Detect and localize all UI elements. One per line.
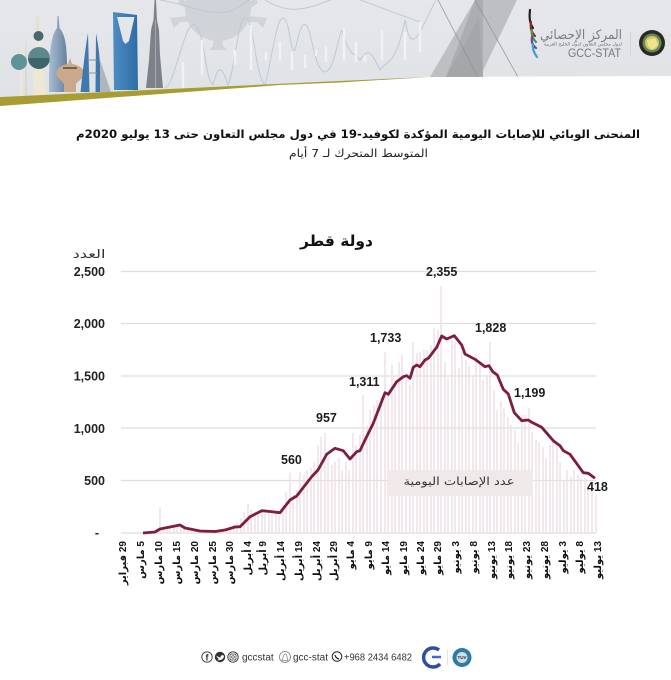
organisation name Arabic: المركز الإحصائي — [540, 28, 622, 43]
x axis date labels: 18 يونيو — [504, 541, 515, 580]
skyline: blue tower — [49, 16, 68, 92]
y axis labels: 1,500 — [74, 370, 105, 384]
skyline: Bahrain world trade center — [80, 33, 111, 92]
logo: round seal — [452, 648, 472, 667]
skyline: Burj Khalifa — [146, 0, 163, 88]
x axis date labels: 24 أبريل — [310, 541, 323, 581]
data labels: 560 — [281, 453, 302, 467]
x axis date labels: 24 مايو — [416, 541, 427, 576]
y axis labels: 1,000 — [74, 422, 105, 436]
x axis date labels: 10 مارس — [154, 541, 165, 584]
data labels: 1,828 — [475, 321, 506, 335]
data labels: 1,199 — [514, 386, 545, 400]
x axis date labels: 8 يوليو — [575, 541, 586, 574]
x axis date labels: 19 مايو — [399, 541, 410, 576]
grey diagonal shapes — [430, 0, 518, 77]
icon: snapchat — [280, 652, 290, 662]
icon: facebook: f — [206, 652, 210, 662]
olive band — [0, 77, 430, 106]
x axis date labels: 13 يونيو — [487, 541, 498, 580]
x axis date labels: 4 مايو — [346, 541, 357, 570]
x axis date labels: 25 مارس — [208, 541, 219, 584]
seven day moving average line — [143, 336, 595, 533]
x axis date labels: 19 أبريل — [292, 541, 305, 581]
data labels: 1,733 — [370, 331, 401, 345]
x axis date labels: 5 مارس — [136, 541, 147, 579]
x axis date labels: 29 فبراير — [118, 541, 129, 586]
x axis date labels: 23 يونيو — [522, 541, 533, 580]
x axis date labels: 20 مارس — [190, 541, 201, 584]
icon: instagram — [228, 652, 238, 662]
organisation subtitle Arabic: لدول مجلس التعاون لدول الخليج العربية — [544, 42, 622, 48]
x axis date labels: 3 يوليو — [558, 541, 569, 574]
y axis labels: 2,000 — [74, 317, 105, 331]
y axis labels — [74, 265, 105, 540]
x axis date labels: 4 أبريل — [241, 541, 254, 575]
logo: GCC emblem — [630, 30, 665, 56]
header banner — [0, 0, 671, 106]
data labels: 1,311 — [349, 375, 380, 389]
icon: virus silhouette — [170, 0, 267, 50]
data labels: 2,355 — [426, 265, 457, 279]
skyline: Kuwait towers — [11, 15, 50, 96]
x axis date labels: 29 مايو — [433, 541, 444, 576]
data labels: 957 — [316, 411, 337, 425]
icon: facebook — [202, 652, 212, 662]
logo: blue G — [424, 648, 441, 667]
y axis labels: 500 — [84, 474, 105, 488]
grid lines — [121, 272, 596, 533]
x axis date labels: 3 يونيو — [451, 541, 462, 574]
legend label box: عدد الإصابات اليومية — [404, 475, 514, 488]
y axis labels: 2,500 — [74, 265, 105, 279]
x axis date labels — [118, 541, 604, 586]
x axis date labels: 15 مارس — [172, 541, 183, 584]
icon: coloured arcs — [530, 10, 537, 57]
x axis date labels: 14 أبريل — [274, 541, 287, 581]
subtitle: المتوسط المتحرك لـ 7 أيام — [289, 146, 428, 160]
x axis date labels: 13 يوليو — [593, 541, 604, 580]
x axis date labels: 28 يونيو — [540, 541, 551, 580]
y axis title: العدد — [72, 247, 106, 261]
x axis date labels: 9 أبريل — [256, 541, 269, 575]
white data bars decoration — [183, 22, 420, 88]
footer contact bar — [202, 648, 472, 667]
chart title: دولة قطر — [299, 232, 373, 250]
GCC-STAT logo — [530, 10, 622, 60]
data labels — [281, 265, 608, 494]
x axis date labels: 8 يونيو — [469, 541, 480, 574]
data labels: 418 — [587, 480, 608, 494]
logo: round seal: TUV — [458, 655, 466, 660]
handle: gcc-stat: gcc-stat — [293, 652, 328, 664]
skyline: Kingdom tower — [113, 12, 138, 90]
organisation name Latin: GCC-STAT — [568, 48, 621, 60]
phone number: +968 2434 6482 — [344, 652, 412, 664]
handle: gccstat: gccstat — [242, 652, 274, 664]
icon: twitter — [215, 652, 225, 662]
icon: whatsapp — [332, 652, 342, 661]
chart: Qatar daily cases — [72, 232, 608, 586]
title: المنحنى الوبائي للإصابات اليومية المؤكدة لكوفيد-19 في دول مجلس التعاون حتى 13 يوليو 2020م — [76, 127, 640, 142]
skyline: domed building — [56, 58, 85, 92]
x axis date labels: 9 مايو — [364, 541, 375, 570]
y axis labels: - — [95, 526, 99, 540]
epidemic curves decoration — [160, 0, 436, 88]
x axis date labels: 30 مارس — [225, 541, 236, 584]
x axis date labels: 29 أبريل — [327, 541, 340, 581]
daily cases bars — [145, 286, 596, 533]
x axis date labels: 14 مايو — [381, 541, 392, 576]
legend label box — [388, 470, 532, 496]
